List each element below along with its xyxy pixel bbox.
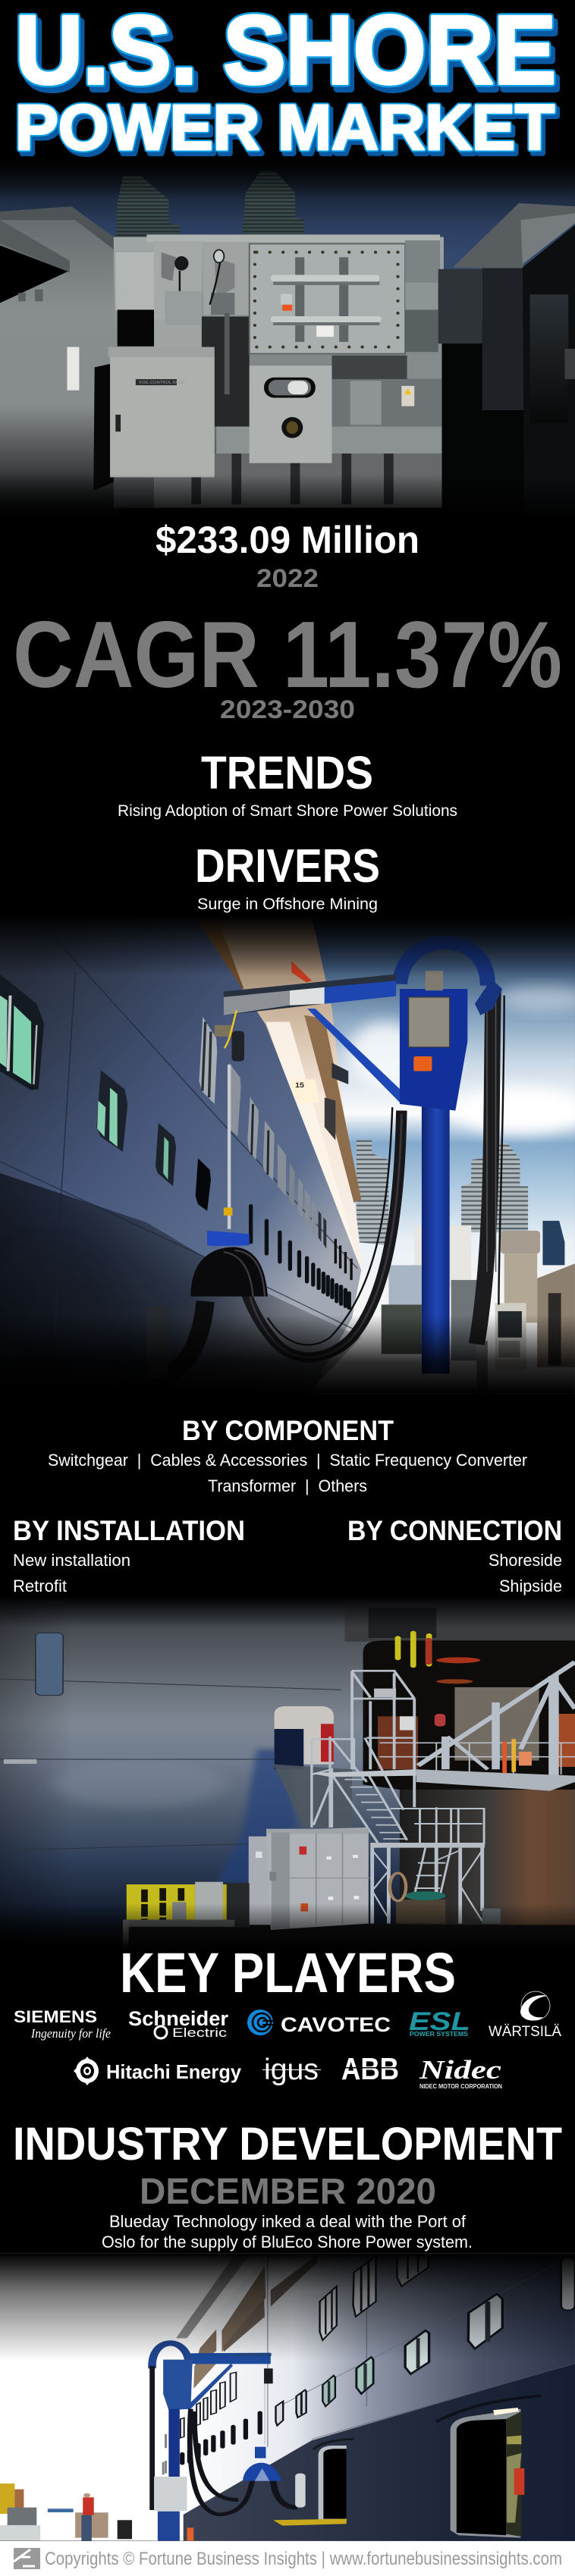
development date: DECEMBER 2020 bbox=[140, 2172, 436, 2212]
logo: igus: igus bbox=[264, 2054, 319, 2086]
photo: hull with shore power platform bbox=[0, 1596, 575, 1959]
photo: ship side with shore power crane bbox=[0, 915, 575, 1429]
logo: ABB: ABB bbox=[341, 2051, 399, 2086]
installation item: retrofit: Retrofit bbox=[13, 1577, 67, 1595]
large door bbox=[436, 2396, 541, 2421]
component list line 2: Transformer | Others bbox=[208, 1476, 367, 1495]
development description: Blueday Technology inked a deal with the Port of bbox=[109, 2212, 467, 2231]
truss bbox=[312, 1662, 575, 1924]
balconies bbox=[222, 2266, 266, 2352]
connection item: shoreside: Shoreside bbox=[489, 1551, 562, 1570]
quay bbox=[0, 2483, 14, 2514]
trends heading: TRENDS bbox=[201, 747, 373, 799]
logo: Cavotec: CAVOTEC bbox=[281, 2013, 391, 2036]
photo: transformer shore power unit bbox=[0, 158, 575, 533]
small door bbox=[313, 2440, 353, 2449]
title: U.S. SHORE bbox=[19, 2, 560, 110]
logo: Nidec: Nidec bbox=[419, 2055, 502, 2085]
photo: ship side with shore power crane: 15 bbox=[295, 1082, 304, 1090]
logo: Schneider Electric bbox=[128, 2007, 228, 2040]
forecast period: 2023-2030 bbox=[220, 695, 355, 724]
by component heading: BY COMPONENT bbox=[182, 1415, 394, 1446]
drivers text: Surge in Offshore Mining bbox=[197, 896, 378, 913]
net bbox=[273, 1765, 352, 1828]
logo: Wartsila: WÄRTSILÄ bbox=[489, 2024, 561, 2040]
logo: Nidec bbox=[419, 2055, 502, 2090]
logo: Schneider Electric: Schneider bbox=[128, 2007, 228, 2030]
logo: Siemens: SIEMENS bbox=[14, 2007, 97, 2026]
logo: Nidec: NIDEC MOTOR CORPORATION bbox=[419, 2083, 502, 2090]
footer logo bbox=[14, 2548, 40, 2569]
logo: Hitachi Energy: Hitachi Energy bbox=[106, 2060, 242, 2083]
key players heading: KEY PLAYERS bbox=[120, 1941, 456, 2004]
logo: ESL Power Systems: POWER SYSTEMS bbox=[410, 2031, 469, 2038]
title bbox=[15, 0, 560, 167]
logo: Schneider Electric: Electric bbox=[172, 2025, 228, 2040]
component list line 1: Switchgear | Cables & Accessories | Static Frequency Converter bbox=[48, 1451, 527, 1470]
dock and cabinets bbox=[118, 1925, 575, 1956]
title: POWER MARKET bbox=[15, 92, 555, 163]
cables and cradle bbox=[234, 1111, 401, 1357]
ship opening bbox=[275, 1706, 334, 1765]
development description: Oslo for the supply of BluEco Shore Power system. bbox=[102, 2232, 473, 2251]
title: POWER MARKET bbox=[18, 96, 558, 167]
photo: transformer shore power unit: FOIL CONTROL PANEL bbox=[140, 381, 187, 385]
title: POWER MARKET bbox=[15, 92, 555, 163]
logo: ESL Power Systems: ESL bbox=[409, 2007, 470, 2036]
crane head bbox=[422, 1104, 450, 1374]
cabinet left bbox=[110, 357, 215, 477]
logo: Wartsila bbox=[489, 1991, 561, 2040]
logo: Cavotec bbox=[247, 2010, 391, 2036]
logo: Hitachi Energy bbox=[74, 2057, 242, 2085]
trends text: Rising Adoption of Smart Shore Power Solutions bbox=[118, 802, 457, 820]
windows bbox=[0, 974, 44, 1090]
logo: Siemens: Ingenuity for life bbox=[30, 2026, 111, 2041]
logo: Siemens bbox=[14, 2007, 111, 2041]
hull bbox=[0, 915, 361, 1426]
connection item: shipside: Shipside bbox=[499, 1577, 562, 1595]
right enclosure bbox=[453, 203, 575, 269]
drivers heading: DRIVERS bbox=[195, 840, 380, 893]
market size value: $233.09 Million bbox=[156, 519, 419, 561]
by installation heading: BY INSTALLATION bbox=[13, 1515, 245, 1546]
main panel bbox=[250, 243, 405, 353]
crane bbox=[190, 2353, 271, 2364]
development description bbox=[102, 2212, 473, 2251]
cabinet right bbox=[250, 366, 331, 463]
installation item: new installation: New installation bbox=[13, 1551, 130, 1570]
base year: 2022 bbox=[256, 564, 319, 593]
photo: cruise ship at berth bbox=[0, 2254, 575, 2541]
superstructure bbox=[194, 915, 363, 1288]
skyline bbox=[357, 1141, 388, 1245]
footer bar bbox=[0, 2541, 575, 2576]
windows bbox=[163, 2254, 502, 2474]
